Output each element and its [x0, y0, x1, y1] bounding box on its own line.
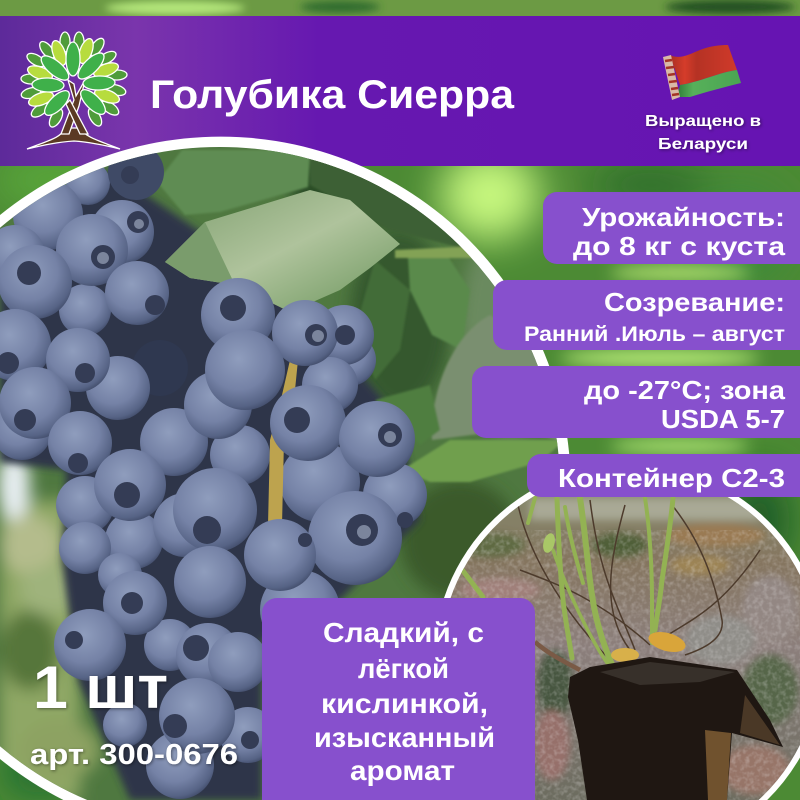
caption: grown in Belarus: Выращено в: [645, 113, 761, 130]
big pale leaf: [165, 190, 400, 312]
main circle ring: [0, 137, 571, 800]
right-hand leaves: [157, 150, 565, 482]
label: yield: до 8 кг с куста: [573, 231, 786, 261]
green stems: [460, 498, 673, 672]
label: frost hardiness: USDA 5-7: [661, 404, 785, 434]
yellow leaves: [611, 648, 639, 662]
label: container: [527, 454, 800, 497]
caption: grown in Belarus: Беларуси: [658, 136, 748, 153]
berries front row: [0, 214, 415, 754]
quantity: 1 шт: [33, 654, 168, 721]
label: container: Контейнер С2-3: [558, 463, 785, 493]
thick brown branch: [535, 642, 580, 670]
taste panel: Сладкий, с: [323, 617, 484, 648]
taste panel: кислинкой,: [321, 688, 488, 719]
berries back row: [0, 144, 427, 799]
dark cluster core: [0, 170, 420, 800]
panel: seedling photo: [450, 496, 800, 800]
small circle ring: [434, 464, 800, 800]
label: ripening: Ранний .Июль – август: [524, 323, 785, 346]
article number: арт. 300-0676: [30, 739, 238, 771]
panel: blueberry photo: [0, 130, 600, 800]
taste panel: лёгкой: [358, 653, 449, 684]
calyx pale centres: [97, 219, 396, 539]
label: frost hardiness: до -27°С; зона: [584, 375, 786, 405]
icon: Belarus flag: [663, 45, 741, 100]
thin twigs: [518, 500, 760, 665]
mottled foliage texture: [430, 530, 800, 800]
label: ripening: [493, 280, 800, 350]
calyx marks: [0, 166, 413, 749]
label: frost hardiness: [472, 366, 800, 438]
field and shrubs: [455, 498, 798, 795]
caption: grown in Belarus: [645, 113, 761, 153]
small green leaf: [543, 533, 555, 553]
fruit stem: [268, 360, 298, 525]
label: yield: [543, 192, 800, 264]
logo: tree: [20, 32, 127, 149]
taste panel: [262, 598, 535, 800]
header band: [0, 16, 800, 166]
trunk and roots: [27, 80, 120, 149]
blurred bottom-left backdrop: [0, 145, 560, 800]
taste panel: изысканный: [314, 722, 495, 753]
label: yield: Урожайность:: [582, 202, 785, 232]
root ball: [568, 657, 783, 800]
label: ripening: Созревание:: [604, 287, 785, 317]
title: Голубика Сиерра: [150, 73, 515, 117]
taste panel: аромат: [350, 755, 455, 786]
